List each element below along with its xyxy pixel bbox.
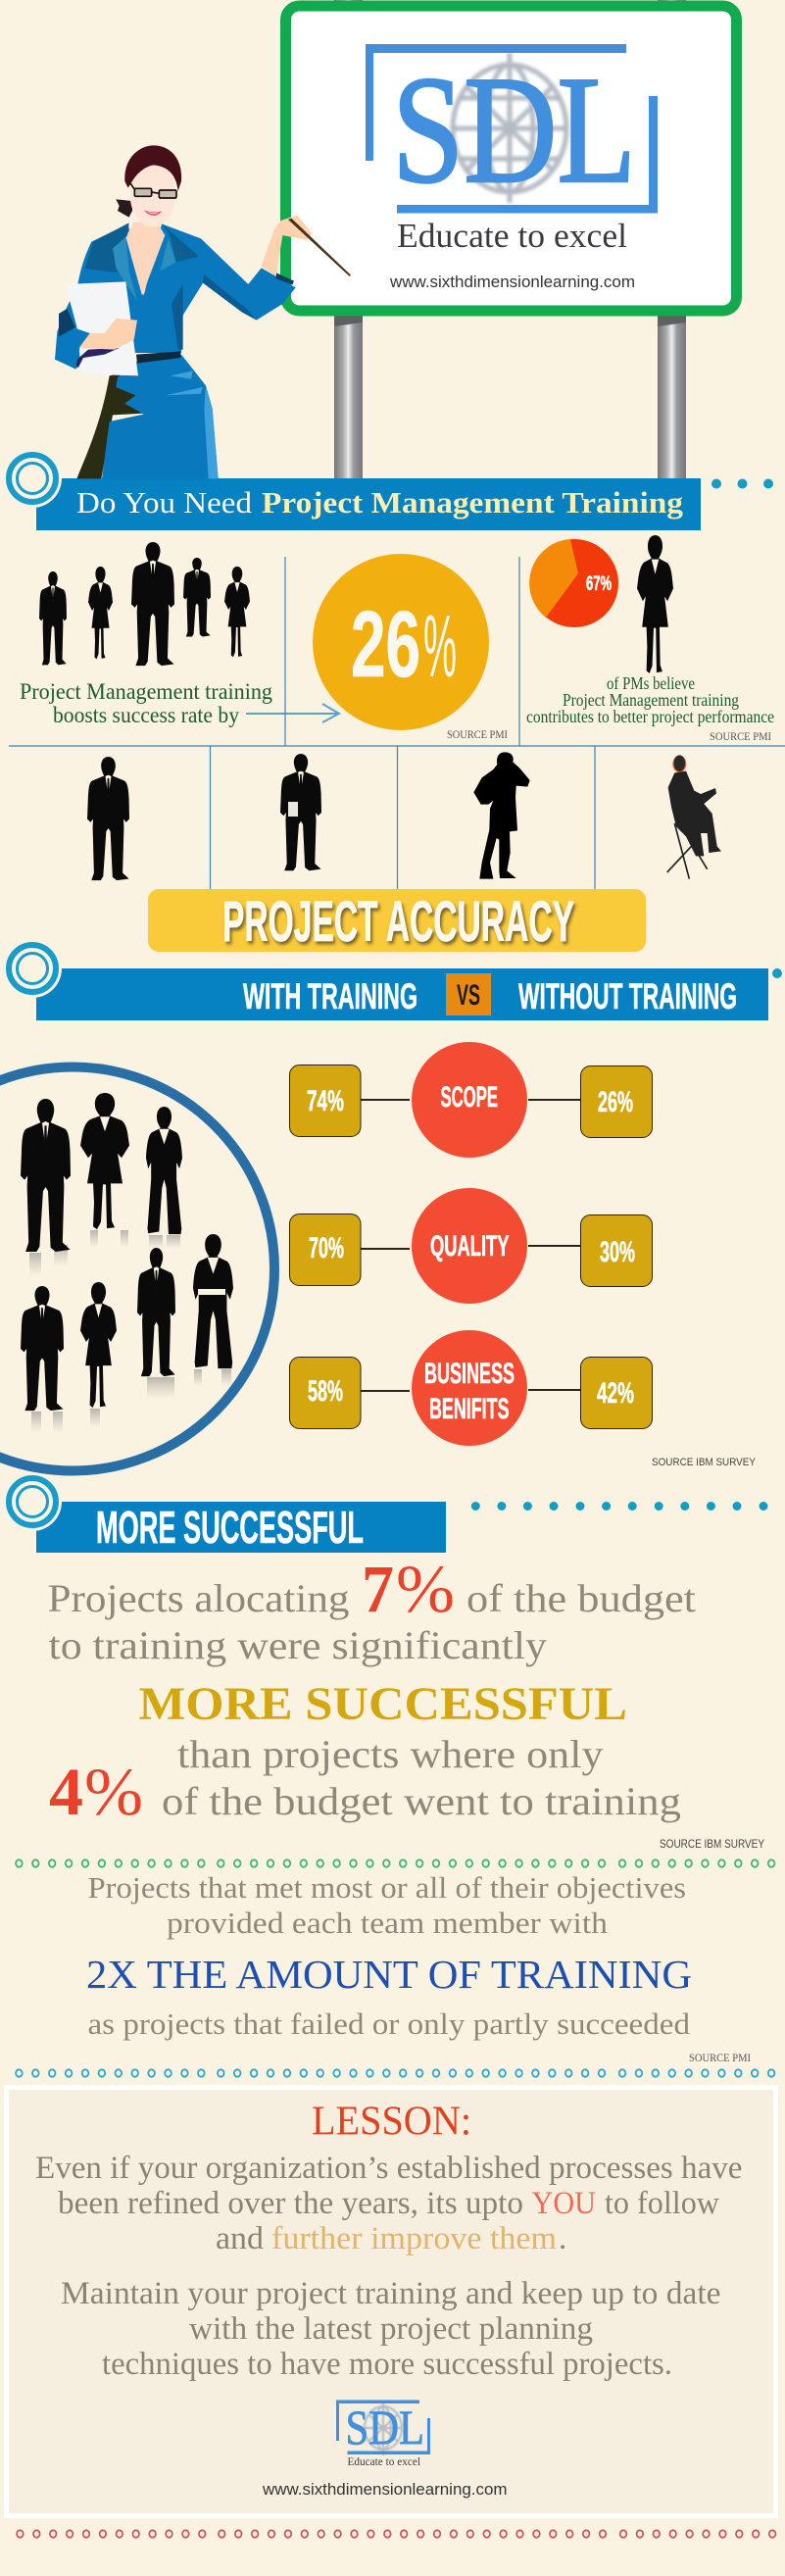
text block: budget statistics: 7 — [362, 1552, 394, 1626]
icon: ring — [3, 939, 62, 998]
text block: budget statistics: of the budget went to training — [162, 1779, 681, 1823]
silhouette row: four professionals — [87, 752, 721, 880]
lesson paragraph one: and — [216, 2221, 265, 2256]
lesson paragraph one: Even if your organization’s established processes have — [35, 2151, 743, 2186]
blue ring divider — [16, 2069, 774, 2077]
signboard with SDL logo — [286, 6, 737, 311]
dot — [772, 968, 782, 978]
stat text: boosts success rate — [20, 679, 272, 727]
text block: 2x training: 2X THE AMOUNT OF TRAINING — [86, 1952, 692, 1997]
section header bar: more successful — [3, 1472, 768, 1553]
big blue circle with team silhouettes — [0, 1066, 274, 1470]
lesson paragraph one: further improve them — [271, 2221, 557, 2256]
small SDL logo: Educate to excel — [347, 2454, 421, 2468]
text block: budget statistics — [47, 1552, 696, 1829]
small SDL logo: SDL — [345, 2400, 424, 2454]
comparison row: business benefits: 58% — [308, 1375, 343, 1408]
stat text: PMs believe — [526, 673, 774, 726]
grid lines — [9, 557, 785, 889]
source label: SOURCE PMI — [710, 729, 771, 743]
comparison row: scope — [290, 1042, 653, 1158]
label: with training: WITH TRAINING — [243, 976, 417, 1016]
lesson paragraph one: been refined over the years, its upto — [58, 2186, 523, 2221]
website url: www.sixthdimensionlearning.com — [262, 2480, 508, 2499]
text block: 2x training: provided each team member with — [167, 1906, 609, 1940]
lesson paragraph two: Maintain your project training and keep up to date — [61, 2276, 721, 2311]
source label: SOURCE IBM SURVEY — [660, 1839, 764, 1851]
comparison row: scope: 74% — [307, 1085, 344, 1117]
icon: blurred globe — [453, 53, 566, 203]
comparison row: business benefits: 42% — [597, 1377, 634, 1410]
lesson paragraph one: . — [559, 2221, 566, 2256]
text block: 2x training: Projects that met most or all of their objectives — [88, 1870, 686, 1905]
comparison row: quality: 70% — [309, 1232, 344, 1264]
big circle: 26 percent — [313, 554, 489, 730]
stat text: boosts success rate: boosts success rate by — [53, 703, 239, 727]
pie chart: 67 percent — [529, 539, 618, 627]
icon: ring — [3, 1472, 62, 1531]
logo letters: SDL — [392, 44, 636, 215]
text block: budget statistics: MORE SUCCESSFUL — [139, 1678, 627, 1730]
comparison row: quality: QUALITY — [430, 1230, 510, 1263]
big circle: 26 percent: % — [423, 598, 457, 696]
logo bracket — [366, 44, 658, 214]
text block: 2x training — [86, 1870, 692, 2041]
lesson paragraph one: YOU — [531, 2186, 596, 2221]
section header bar: with vs without training — [3, 939, 782, 1020]
icon: ring — [3, 449, 62, 508]
people group silhouettes — [39, 542, 250, 666]
green ring divider — [16, 1859, 774, 1867]
heading emphasis: Project Management Training — [262, 485, 684, 520]
text block: budget statistics: to training were significantly — [49, 1623, 547, 1667]
illustration: businesswoman presenting — [55, 145, 351, 478]
lesson paragraph two — [61, 2276, 721, 2382]
lesson heading: LESSON: — [312, 2100, 471, 2145]
panel: lesson — [6, 2088, 776, 2515]
text block: budget statistics: % — [84, 1755, 143, 1829]
comparison row: quality: 30% — [600, 1236, 635, 1268]
source label: SOURCE PMI — [447, 727, 508, 741]
comparison row: scope: 26% — [598, 1086, 633, 1118]
lesson paragraph two: with the latest project planning — [189, 2311, 593, 2347]
text block: 2x training: as projects that failed or only partly succeeded — [88, 2006, 691, 2041]
comparison row: business benefits: BENIFITS — [429, 1393, 510, 1425]
stat text: PMs believe: Project Management training — [563, 690, 739, 710]
section header bar: do you need training — [3, 449, 773, 530]
website url: www.sixthdimensionlearning.com — [389, 272, 635, 291]
vs badge — [446, 973, 491, 1016]
heading text: Do You Need — [76, 485, 253, 520]
comparison row: scope: SCOPE — [441, 1081, 498, 1114]
red ring divider — [17, 2530, 775, 2538]
arrow to 26 percent — [246, 704, 339, 722]
big circle: 26 percent: 26 — [351, 592, 420, 697]
text block: budget statistics: of the budget — [466, 1576, 696, 1620]
comparison row: business benefits: BUSINESS — [424, 1358, 515, 1390]
lesson paragraph two: techniques to have more successful projects. — [102, 2347, 672, 2382]
text block: budget statistics: % — [396, 1552, 455, 1626]
tagline: Educate to excel — [397, 217, 627, 255]
banner: project accuracy — [148, 889, 646, 954]
stat text: PMs believe: of PMs believe — [607, 673, 695, 693]
comparison row: business benefits — [290, 1330, 653, 1446]
source label: SOURCE IBM SURVEY — [652, 1457, 757, 1468]
text block: budget statistics: 4 — [49, 1755, 83, 1829]
vs badge: VS — [457, 979, 480, 1012]
lesson paragraph one — [35, 2151, 743, 2256]
text block: budget statistics: Projects alocating — [47, 1576, 349, 1620]
dots — [471, 1502, 768, 1511]
comparison row: quality — [290, 1188, 653, 1304]
woman silhouette — [637, 535, 673, 673]
heading text: MORE SUCCESSFUL — [96, 1502, 364, 1553]
signboard posts — [334, 0, 686, 480]
source label: SOURCE PMI — [689, 2051, 751, 2064]
pie chart: 67 percent: 67% — [586, 572, 612, 595]
dots — [711, 478, 773, 488]
stat text: boosts success rate: Project Management training — [20, 679, 272, 704]
small SDL logo — [336, 2400, 430, 2468]
lesson paragraph one: to follow — [605, 2186, 719, 2221]
text block: budget statistics: than projects where only — [177, 1732, 604, 1776]
